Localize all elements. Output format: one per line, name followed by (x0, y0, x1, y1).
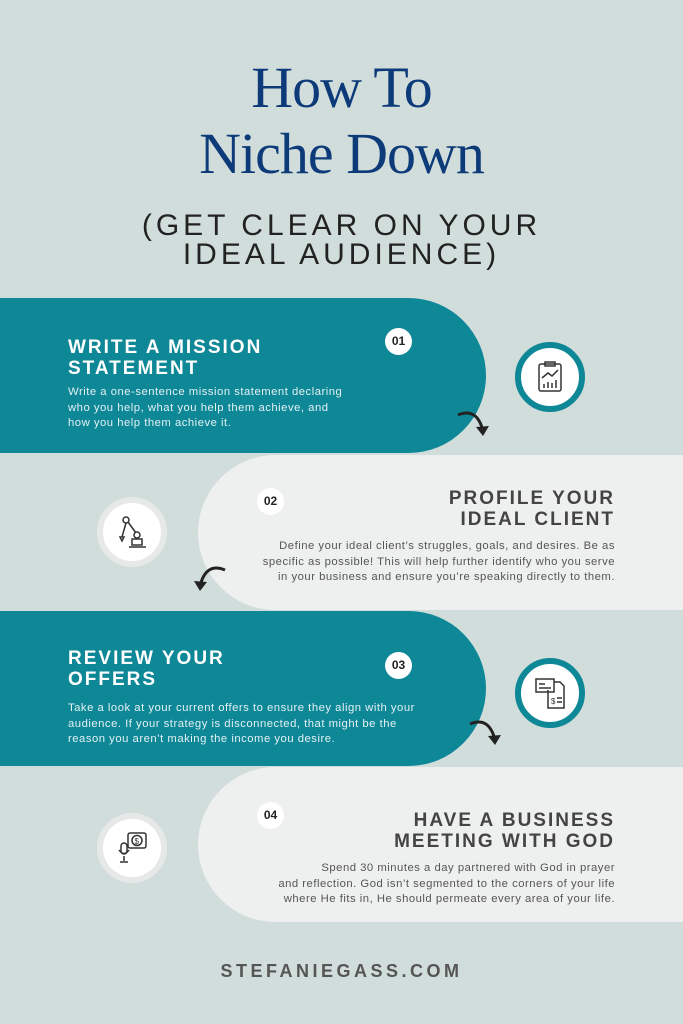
title (199, 55, 484, 186)
heading 2: PROFILE YOUR (449, 488, 615, 509)
heading 1: WRITE A MISSION (68, 337, 262, 358)
badge 01 (385, 328, 412, 355)
footer: STEFANIEGASS.COM (220, 961, 463, 981)
subtitle (142, 209, 541, 271)
arrow 1 (458, 412, 489, 436)
panel: step 1 (0, 298, 486, 453)
panel: step 2 (198, 455, 683, 610)
heading 3: OFFERS (68, 669, 157, 690)
badge 04: 04 (264, 808, 277, 822)
panel: step 4 (198, 767, 683, 922)
title: How To (251, 55, 432, 120)
badge 04 (257, 802, 284, 829)
heading 4 (394, 810, 615, 852)
heading 2 (449, 488, 615, 530)
text 3: Take a look at your current offers to ensure they align with your (68, 702, 415, 714)
icon: mic and dollar: $ (134, 837, 140, 846)
heading 3: REVIEW YOUR (68, 648, 225, 669)
arrow 2 (194, 566, 226, 591)
text 1 (68, 386, 342, 429)
subtitle: (GET CLEAR ON YOUR (142, 209, 541, 242)
text 2: specific as possible! This will help further identify who you serve (263, 556, 615, 568)
arrow 3 (470, 720, 501, 745)
text 1: how you help them achieve it. (68, 417, 231, 429)
heading 4: MEETING WITH GOD (394, 831, 615, 852)
heading 2: IDEAL CLIENT (460, 509, 615, 530)
text 3: reason you aren’t making the income you desire. (68, 733, 335, 745)
icon: robot arm (97, 497, 167, 567)
panel: step 3 (0, 611, 486, 766)
badge 02 (257, 488, 284, 515)
text 4: and reflection. God isn’t segmented to the corners of your life (278, 878, 615, 890)
heading 1: STATEMENT (68, 358, 199, 379)
badge 01: 01 (392, 334, 405, 348)
text 2: Define your ideal client’s struggles, goals, and desires. Be as (279, 540, 615, 552)
text 3: audience. If your strategy is disconnected, that might be the (68, 718, 397, 730)
text 4: where He fits in, He should permeate every area of your life. (284, 893, 615, 905)
badge 02: 02 (264, 494, 277, 508)
text 2 (263, 540, 615, 583)
icon: invoice: $ (551, 697, 556, 706)
heading 4: HAVE A BUSINESS (414, 810, 615, 831)
badge 03 (385, 652, 412, 679)
badge 03: 03 (392, 658, 405, 672)
subtitle: IDEAL AUDIENCE) (183, 238, 500, 271)
icon: clipboard chart (515, 342, 585, 412)
text 1: who you help, what you help them achieve, and (68, 402, 329, 414)
text 4 (278, 862, 615, 905)
text 3 (68, 702, 415, 745)
icon: invoice (515, 658, 585, 728)
heading 3 (68, 648, 225, 690)
text 2: in your business and ensure you’re speaking directly to them. (278, 571, 615, 583)
text 4: Spend 30 minutes a day partnered with God in prayer (321, 862, 615, 874)
icon: mic and dollar (97, 813, 167, 883)
heading 1 (68, 337, 262, 379)
text 1: Write a one-sentence mission statement declaring (68, 386, 342, 398)
title: Niche Down (199, 121, 484, 186)
